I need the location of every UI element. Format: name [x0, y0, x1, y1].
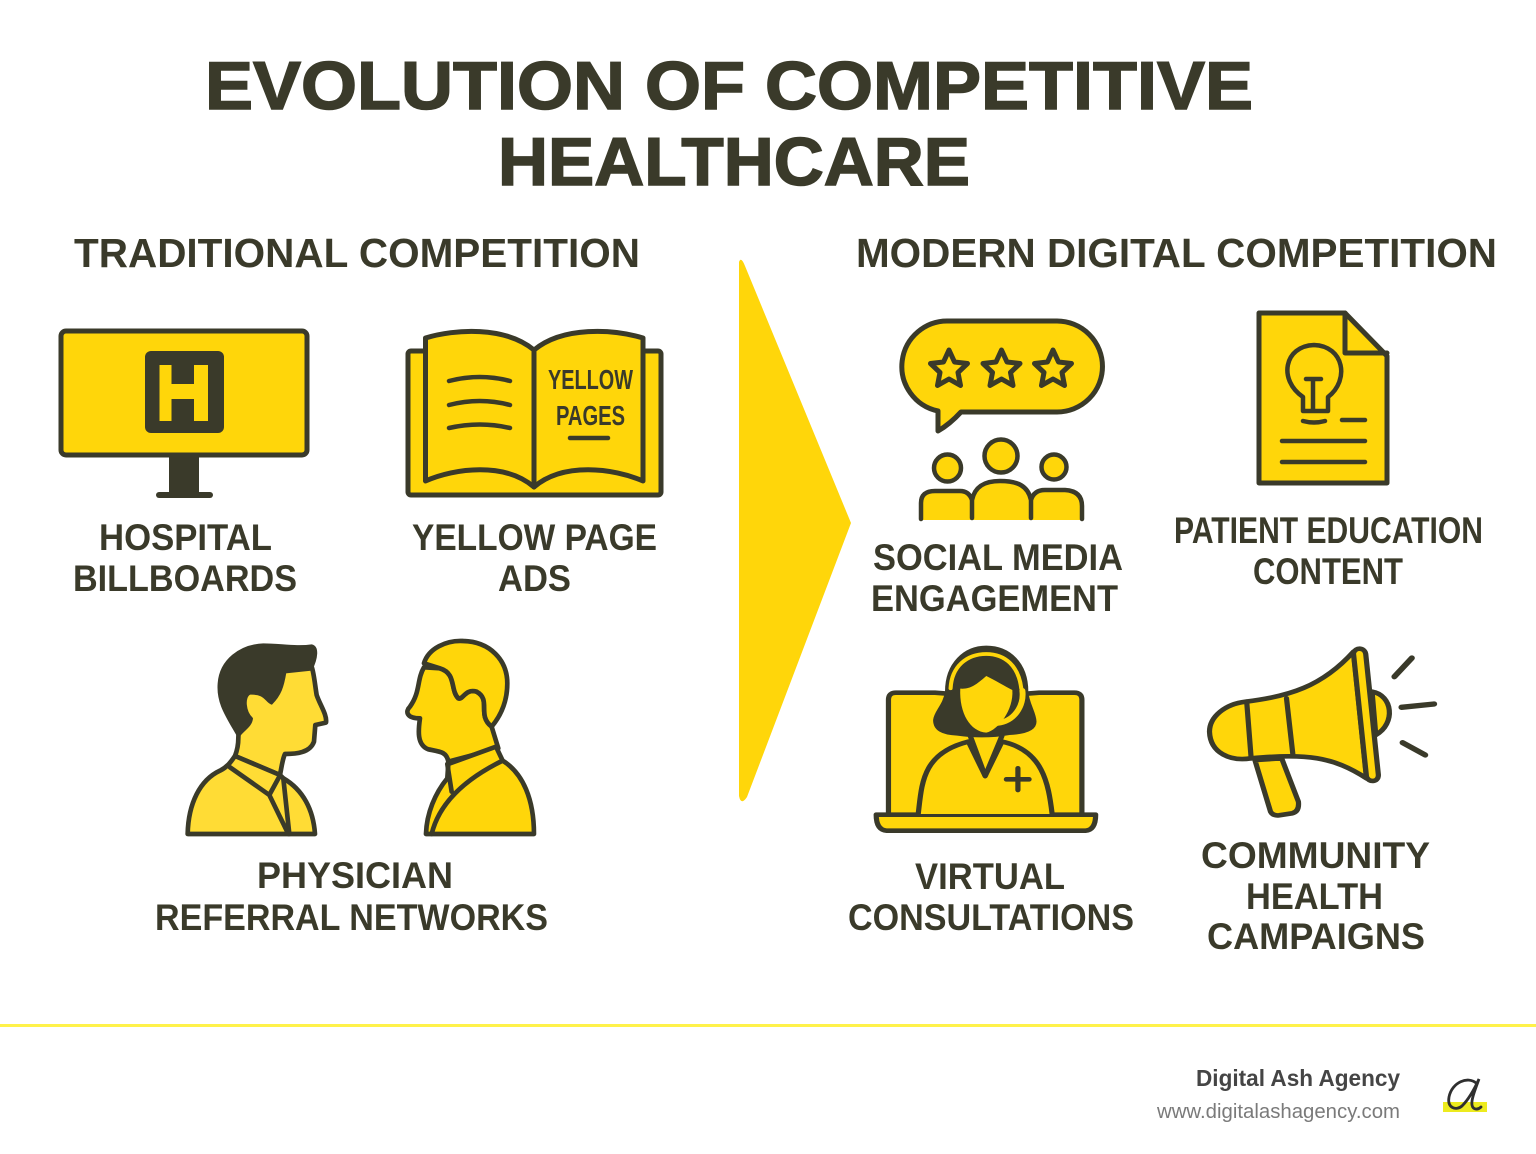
footer divider	[0, 1024, 1536, 1027]
title	[205, 48, 1253, 200]
icon: two physicians facing each other	[188, 641, 534, 834]
label: virtual consultations: VIRTUAL	[915, 856, 1065, 897]
icon: hospital billboard	[61, 331, 307, 498]
label: physician referral networks: REFERRAL NETWORKS	[155, 897, 548, 938]
label: physician referral networks: PHYSICIAN	[257, 855, 453, 896]
label: social media engagement: ENGAGEMENT	[871, 578, 1118, 619]
label: hospital billboards: BILLBOARDS	[73, 558, 297, 599]
icon: yellow pages book: PAGES	[556, 400, 625, 431]
label: virtual consultations	[848, 856, 1134, 938]
left physician	[188, 644, 326, 834]
heading: traditional competition: TRADITIONAL COMPETITION	[74, 230, 640, 276]
right physician	[407, 641, 534, 834]
title: EVOLUTION OF COMPETITIVE	[205, 48, 1253, 124]
logo: alpha mark	[1443, 1079, 1487, 1112]
label: social media engagement: SOCIAL MEDIA	[873, 537, 1123, 578]
label: physician referral networks	[155, 855, 548, 938]
arrow: transition from traditional to modern	[739, 260, 851, 801]
label: yellow page ads	[412, 517, 657, 599]
icon: virtual consultation on laptop	[876, 647, 1096, 831]
heading: modern digital competition: MODERN DIGITAL COMPETITION	[856, 230, 1497, 276]
label: virtual consultations: CONSULTATIONS	[848, 897, 1134, 938]
label: community health campaigns: COMMUNITY	[1201, 835, 1430, 876]
footer: agency name and url	[1156, 1065, 1400, 1123]
label: patient education content	[1174, 510, 1483, 592]
icon: megaphone	[1209, 649, 1434, 815]
icon: patient education document	[1259, 313, 1387, 483]
label: social media engagement	[871, 537, 1123, 619]
icon: social media reviews and community	[902, 321, 1102, 520]
label: community health campaigns: CAMPAIGNS	[1207, 916, 1425, 957]
label: community health campaigns: HEALTH	[1246, 876, 1383, 917]
label: yellow page ads: YELLOW PAGE	[412, 517, 657, 558]
footer: agency name and url: www.digitalashagency.com	[1156, 1101, 1400, 1123]
footer: agency name and url: Digital Ash Agency	[1196, 1065, 1400, 1091]
label: yellow page ads: ADS	[498, 558, 571, 599]
icon: yellow pages book: YELLOW	[548, 364, 633, 395]
label: patient education content: CONTENT	[1253, 551, 1403, 592]
title: HEALTHCARE	[498, 124, 970, 200]
label: community health campaigns	[1201, 835, 1430, 957]
icon: yellow pages book	[408, 331, 661, 495]
label: hospital billboards: HOSPITAL	[99, 517, 272, 558]
label: hospital billboards	[73, 517, 297, 599]
